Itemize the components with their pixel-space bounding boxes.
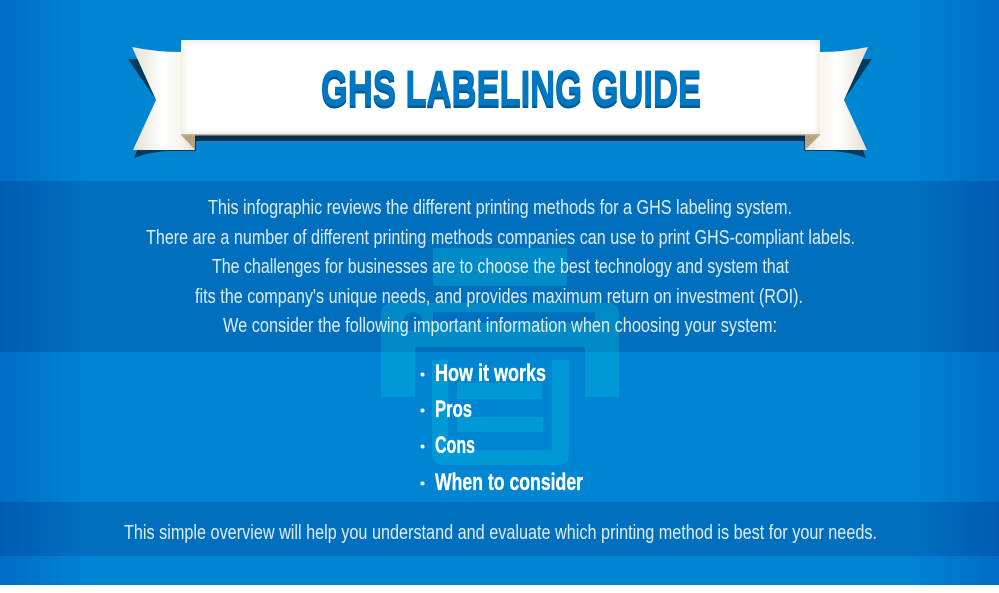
right tail shadow xyxy=(804,59,872,158)
left tail shadow xyxy=(128,59,196,158)
ribbon edge xyxy=(181,134,820,136)
left fold xyxy=(181,135,195,150)
item: cons: Cons xyxy=(435,432,475,459)
intro text: fits the company's unique needs, and provides maximum return on investment (ROI). xyxy=(195,285,803,308)
item: how it works xyxy=(420,360,546,387)
right tail xyxy=(805,47,868,150)
intro text: This infographic reviews the different printing methods for a GHS labeling system. xyxy=(208,196,792,219)
intro text xyxy=(146,196,855,337)
bullet list xyxy=(420,360,583,496)
summary band xyxy=(0,502,999,556)
intro band xyxy=(0,181,999,352)
item: pros xyxy=(420,396,472,423)
item: when to consider: When to consider xyxy=(435,469,583,496)
intro text: We consider the following important information when choosing your system: xyxy=(223,314,777,337)
intro text: The challenges for businesses are to choose the best technology and system that xyxy=(212,255,789,278)
item: pros: Pros xyxy=(435,396,472,423)
item: cons xyxy=(420,432,475,459)
title ribbon xyxy=(128,40,872,158)
right fold xyxy=(805,135,820,150)
title face: GHS LABELING GUIDE xyxy=(321,62,701,116)
ribbon body xyxy=(181,40,820,135)
watermark logo xyxy=(381,248,619,465)
title extrusion: GHS LABELING GUIDE xyxy=(321,64,701,118)
ribbon highlight xyxy=(184,43,817,132)
ribbon shadow xyxy=(195,135,805,141)
title xyxy=(321,62,701,118)
item: when to consider xyxy=(420,469,583,496)
item: how it works: How it works xyxy=(435,360,546,387)
left tail xyxy=(132,47,195,150)
